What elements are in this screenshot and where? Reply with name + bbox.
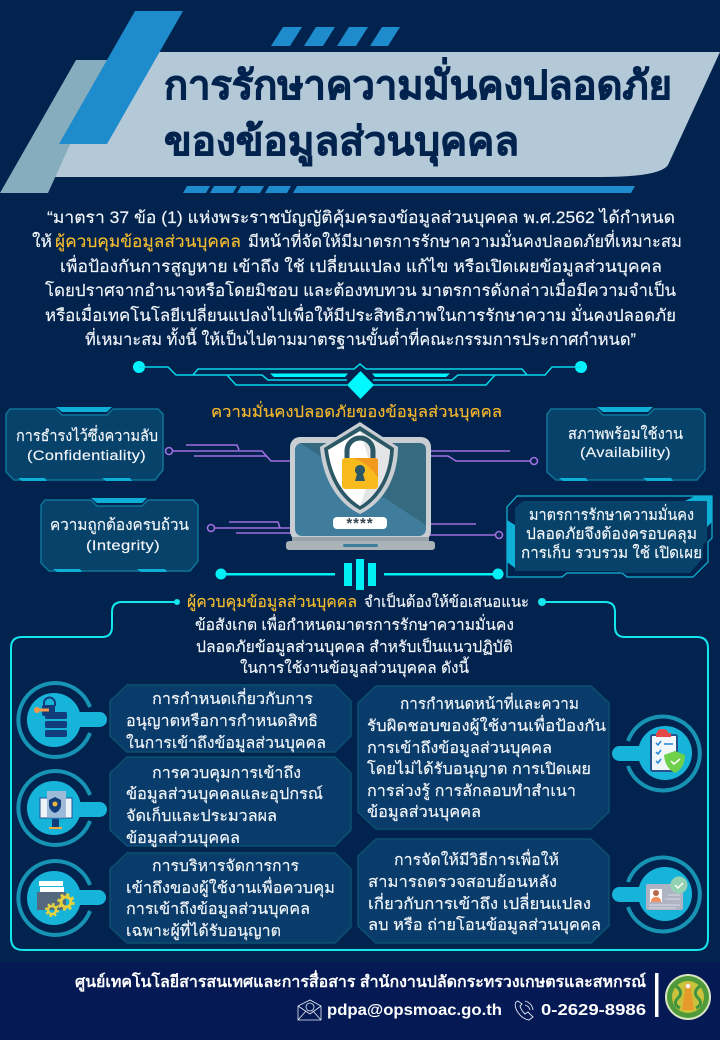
panel: user responsibilities: โดยไม่ได้รับอนุญาต การเปิดเผย bbox=[367, 760, 591, 779]
card: availability: (Availability) bbox=[580, 445, 671, 460]
panel: access control: จัดเก็บและประมวลผล bbox=[126, 806, 277, 825]
icon: phone bbox=[515, 1001, 533, 1020]
panel: audit trail: การจัดให้มีวิธีการเพื่อให้ bbox=[394, 849, 559, 869]
panel: access control: ข้อมูลส่วนบุคคลและอุปกรณ์ bbox=[126, 785, 323, 804]
icon: folder with gears bbox=[18, 861, 106, 935]
card: confidentiality: การธำรงไว้ซึ่งความลับ bbox=[16, 425, 158, 445]
icon: checklist with shield bbox=[612, 716, 700, 790]
quoted legal paragraph: ที่เหมาะสม ทั้งนี้ ให้เป็นไปตามมาตรฐานขั้นต่ำที่คณะกรรมการประกาศกำหนด” bbox=[85, 327, 636, 349]
card: availability: สภาพพร้อมใช้งาน bbox=[568, 425, 683, 443]
footer bbox=[0, 962, 720, 1040]
card: integrity bbox=[41, 498, 198, 572]
quoted legal paragraph: ผู้ควบคุมข้อมูลส่วนบุคคล bbox=[55, 233, 241, 252]
icon: monitor with shield document bbox=[18, 771, 107, 845]
panel: access control bbox=[110, 757, 351, 848]
panel: access control: ข้อมูลส่วนบุคคล bbox=[126, 830, 240, 848]
intro text: จำเป็นต้องให้ข้อเสนอแนะ bbox=[364, 592, 529, 611]
emblem bbox=[665, 974, 711, 1020]
panel: user responsibilities: รับผิดชอบของผู้ใช้งานเพื่อป้องกัน bbox=[367, 715, 606, 736]
card: safeguards scope: มาตรการรักษาความมั่นคง bbox=[529, 504, 694, 524]
footer: ศูนย์เทคโนโลยีสารสนเทศและการสื่อสาร สำนักงานปลัดกระทรวงเกษตรและสหกรณ์ bbox=[75, 970, 646, 993]
card: confidentiality bbox=[6, 407, 163, 481]
footer: pdpa@opsmoac.go.th bbox=[327, 1002, 502, 1019]
intro text: ผู้ควบคุมข้อมูลส่วนบุคคล bbox=[187, 594, 357, 612]
circuit lines bbox=[166, 445, 538, 538]
card: safeguards scope: การเก็บ รวบรวม ใช้ เปิดเผย bbox=[521, 543, 702, 562]
footer: 0-2629-8986 bbox=[541, 1002, 646, 1019]
icon: envelope bbox=[298, 1000, 321, 1020]
panel: user access management: การบริหารจัดการการ bbox=[152, 858, 299, 875]
illustration: laptop with security shield: **** bbox=[346, 515, 374, 532]
card: safeguards scope bbox=[507, 496, 712, 577]
card: safeguards scope: ปลอดภัยจึงต้องครอบคลุม bbox=[526, 526, 697, 544]
panel: audit trail: ลบ หรือ ถ่ายโอนข้อมูลส่วนบุคคล bbox=[368, 916, 601, 935]
section heading: ความมั่นคงปลอดภัยของข้อมูลส่วนบุคคล bbox=[211, 401, 502, 422]
icon: key and server bbox=[18, 683, 107, 757]
quoted legal paragraph: เพื่อป้องกันการสูญหาย เข้าถึง ใช้ เปลี่ยนแปลง แก้ไข หรือเปิดเผยข้อมูลส่วนบุคคล bbox=[60, 255, 662, 277]
panel: user access management bbox=[110, 853, 351, 943]
illustration: laptop with security shield bbox=[286, 422, 435, 550]
card: confidentiality: (Confidentiality) bbox=[27, 448, 146, 463]
circuit divider bottom bbox=[216, 559, 504, 590]
panel: user responsibilities bbox=[358, 686, 609, 829]
intro text: ปลอดภัยข้อมูลส่วนบุคคล สำหรับเป็นแนวปฏิบัติ bbox=[196, 637, 513, 657]
card: integrity: ความถูกต้องครบถ้วน bbox=[50, 517, 189, 535]
panel: user access management: เฉพาะผู้ที่ได้รับอนุญาต bbox=[126, 920, 281, 941]
title text: ของข้อมูลส่วนบุคคล bbox=[164, 120, 519, 167]
panel: user access management: การเข้าถึงข้อมูลส่วนบุคคล bbox=[126, 901, 310, 919]
intro text: ในการใช้งานข้อมูลส่วนบุคคล ดังนี้ bbox=[240, 656, 469, 678]
panel: user access management: เข้าถึงของผู้ใช้งานเพื่อควบคุม bbox=[126, 877, 335, 898]
quoted legal paragraph: มีหน้าที่จัดให้มีมาตรการรักษาความมั่นคงปลอดภัยที่เหมาะสม bbox=[248, 230, 682, 251]
card: availability bbox=[547, 407, 705, 481]
panel: user responsibilities: การเข้าถึงข้อมูลส่วนบุคคล bbox=[367, 740, 552, 758]
panel: audit trail: เกี่ยวกับการเข้าถึง เปลี่ยนแปลง bbox=[368, 893, 591, 913]
quoted legal paragraph: “มาตรา 37 ข้อ (1) แห่งพระราชบัญญัติคุ้มครองข้อมูลส่วนบุคคล พ.ศ.2562 ได้กำหนด bbox=[47, 208, 675, 228]
panel: access authorization: อนุญาตหรือการกำหนดสิทธิ bbox=[126, 712, 318, 731]
outline frame bbox=[11, 598, 708, 950]
quoted legal paragraph bbox=[32, 208, 682, 349]
panel: access authorization: ในการเข้าถึงข้อมูลส่วนบุคคล bbox=[126, 734, 326, 753]
intro text: ข้อสังเกต เพื่อกำหนดมาตรการรักษาความมั่นคง bbox=[195, 614, 514, 634]
title text: การรักษาความมั่นคงปลอดภัย bbox=[164, 57, 672, 108]
panel: access control: การควบคุมการเข้าถึง bbox=[152, 765, 301, 783]
panel: access authorization bbox=[110, 685, 351, 753]
title text bbox=[164, 57, 672, 167]
panel: audit trail: สามารถตรวจสอบย้อนหลัง bbox=[368, 874, 557, 891]
quoted legal paragraph: ให้ bbox=[32, 232, 52, 251]
circuit divider top bbox=[133, 361, 587, 399]
icon: id card with check bbox=[612, 858, 700, 932]
panel: audit trail bbox=[358, 839, 609, 943]
quoted legal paragraph: หรือเมื่อเทคโนโลยีเปลี่ยนแปลงไปเพื่อให้มีประสิทธิภาพในการรักษาความ มั่นคงปลอดภัย bbox=[45, 304, 676, 325]
panel: user responsibilities: การกำหนดหน้าที่และความ bbox=[400, 693, 579, 713]
panel: user responsibilities: การล่วงรู้ การลักลอบทำสำเนา bbox=[367, 783, 576, 801]
intro text bbox=[187, 592, 529, 678]
card: integrity: (Integrity) bbox=[86, 538, 160, 553]
panel: user responsibilities: ข้อมูลส่วนบุคคล bbox=[367, 804, 481, 822]
quoted legal paragraph: โดยปราศจากอำนาจหรือโดยมิชอบ และต้องทบทวน มาตรการดังกล่าวเมื่อมีความจำเป็น bbox=[45, 279, 676, 300]
panel: access authorization: การกำหนดเกี่ยวกับการ bbox=[152, 688, 313, 708]
title banner bbox=[0, 11, 720, 193]
